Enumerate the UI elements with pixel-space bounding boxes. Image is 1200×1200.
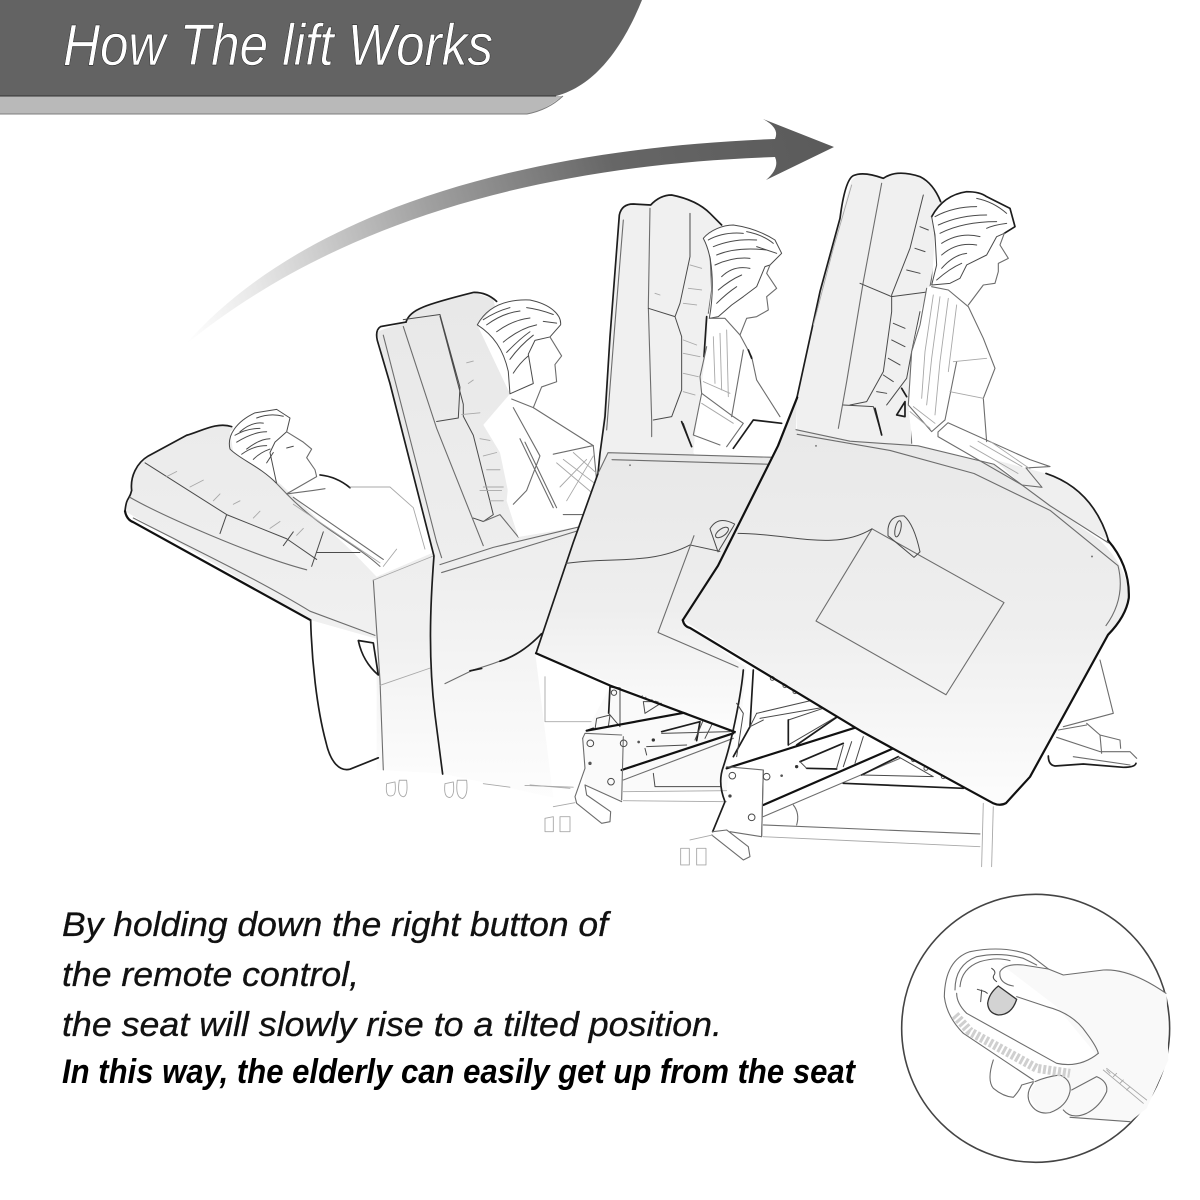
person standing up: [908, 192, 1020, 458]
person seated: [693, 225, 782, 457]
person reclined: [229, 409, 425, 566]
line two: the remote control,: [62, 956, 359, 994]
arrow: rising motion: [185, 119, 834, 345]
chair back: [797, 172, 1020, 458]
header banner: [0, 0, 642, 114]
chair side panel: [536, 453, 798, 734]
illustration: lift mechanism behind front chair: [681, 670, 993, 867]
seat pocket: [816, 529, 1004, 695]
illustration: lift mechanism behind third chair: [530, 677, 733, 832]
line one: By holding down the right button of: [62, 906, 612, 944]
casters: [386, 780, 407, 797]
chair back: [598, 195, 782, 473]
illustration: partially raised chair with person: [377, 292, 620, 799]
remote body: [944, 949, 1098, 1080]
illustration: legs and shoes of front person: [1048, 660, 1137, 767]
seat knob: [888, 516, 920, 557]
casters: [445, 780, 467, 799]
bold line: In this way, the elderly can easily get up from the seat: [62, 1053, 857, 1091]
remote control inset: [902, 894, 1170, 1162]
hand on armrest: [938, 423, 1050, 487]
title: How The lift Works: [63, 13, 493, 78]
body text: [62, 906, 857, 1091]
illustration: reclined chair with person: [125, 409, 442, 797]
line three: the seat will slowly rise to a tilted position.: [62, 1006, 722, 1044]
chair side panel: [683, 397, 1129, 806]
person seated back: [477, 300, 597, 537]
hand: [990, 963, 1168, 1122]
illustration: front chair fully lifted with person: [683, 172, 1129, 806]
illustration: raised chair with person: [536, 195, 798, 734]
